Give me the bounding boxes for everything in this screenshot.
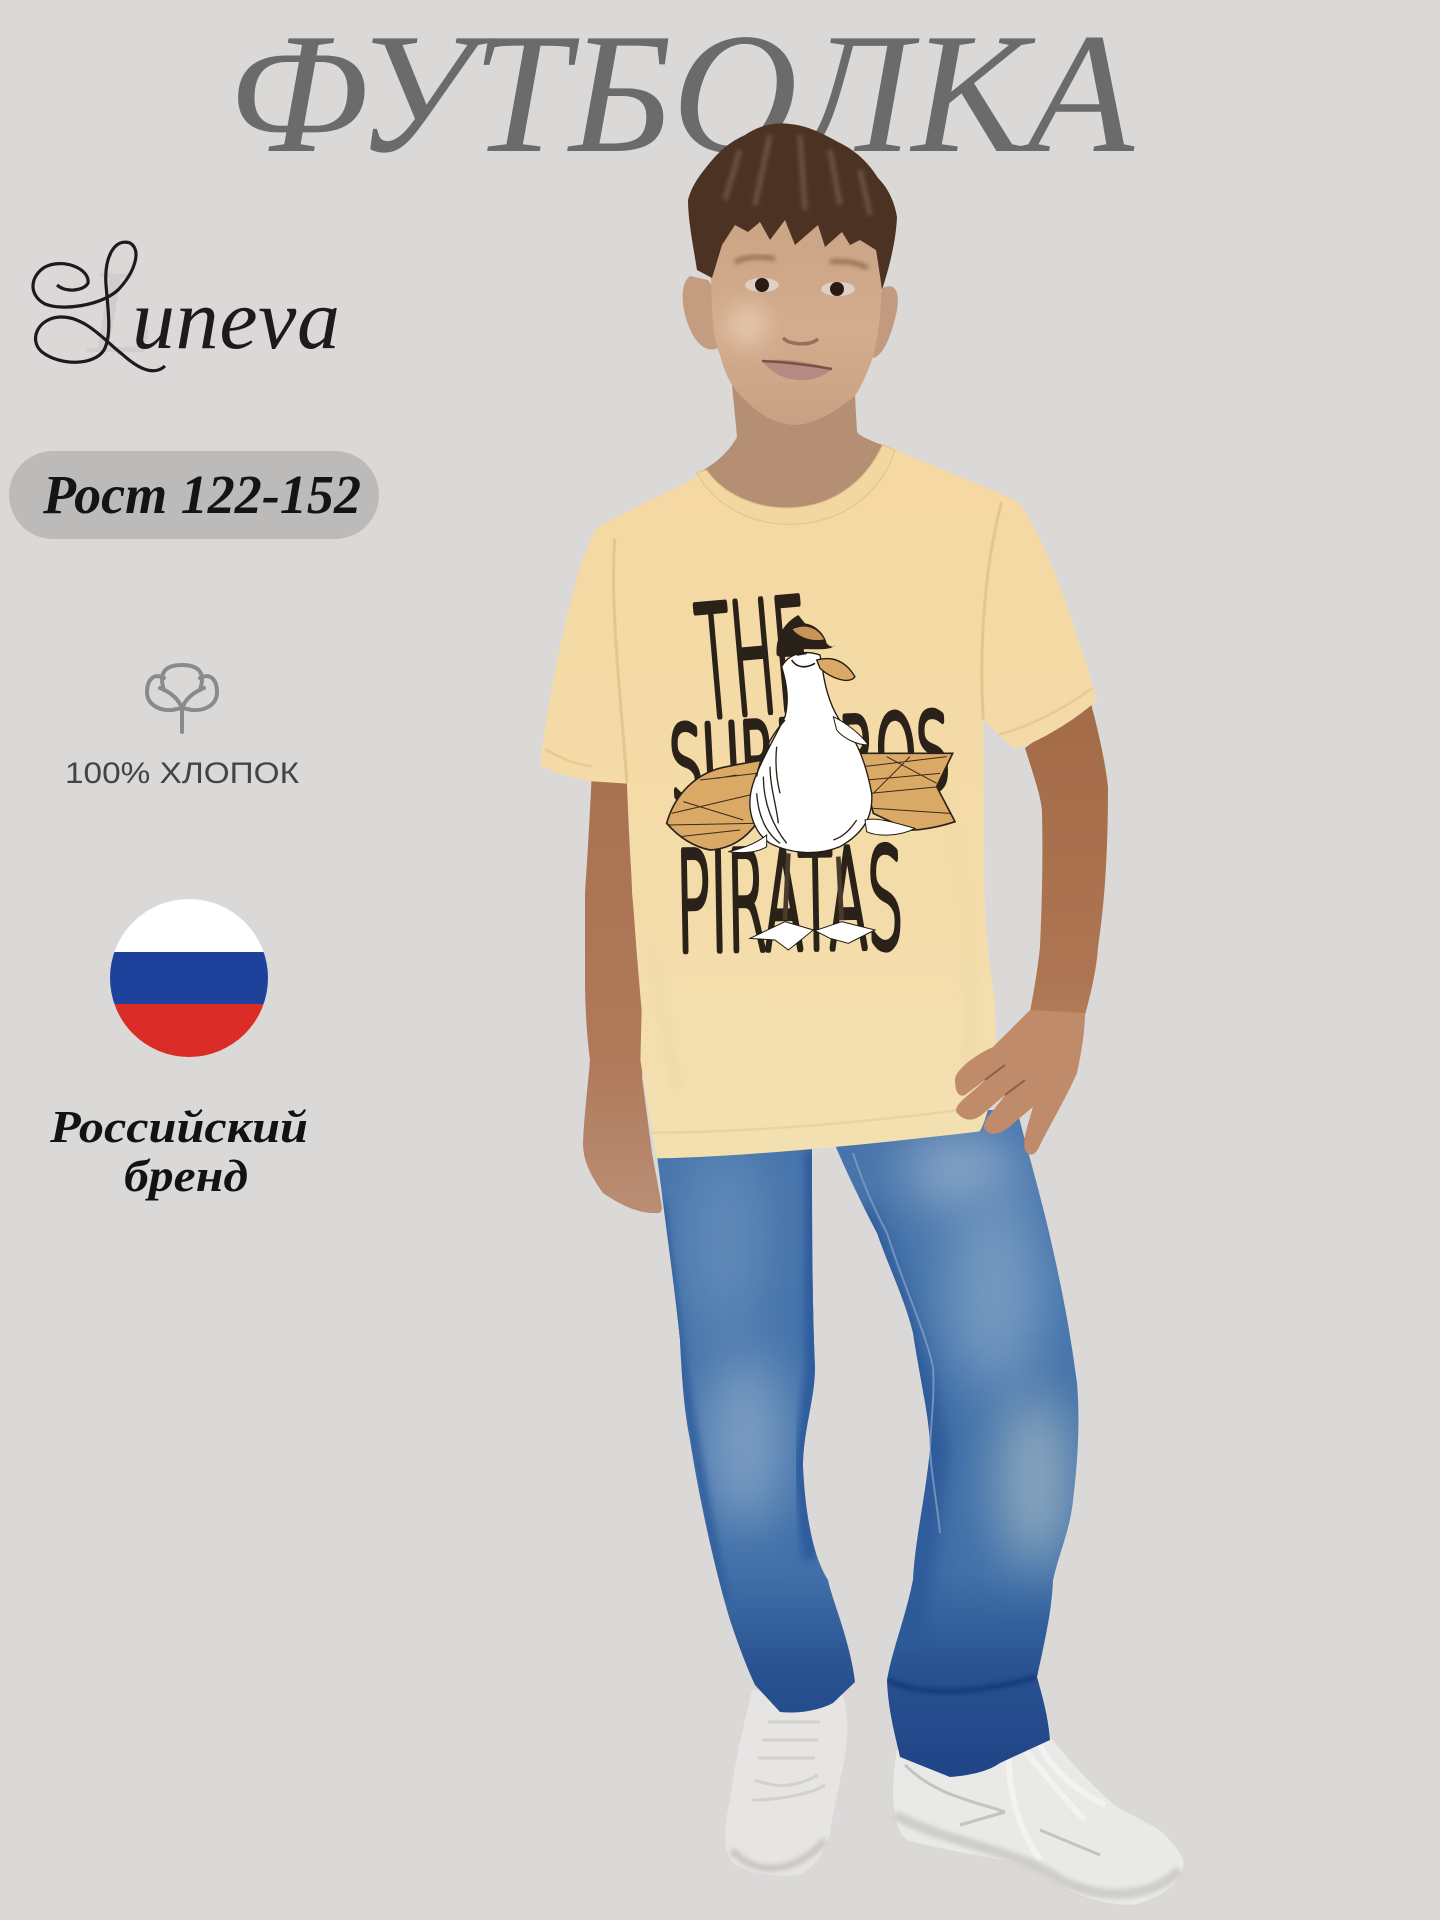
brand caption: Российский (49, 1101, 308, 1152)
white right (821, 282, 855, 296)
upper wing (833, 717, 868, 745)
pupil left (755, 278, 769, 292)
collar (697, 444, 895, 524)
nose (783, 338, 818, 344)
hair (688, 123, 897, 290)
t-shirt (540, 444, 1097, 1158)
infographic canvas (9, 37, 1184, 1905)
lip line (762, 361, 832, 369)
beak (817, 659, 855, 680)
hair streaks (725, 135, 870, 215)
wing tip right (865, 819, 915, 835)
icon: Russian flag (110, 899, 268, 1057)
eyes (745, 278, 855, 296)
jeans (657, 1110, 1078, 1777)
feet (750, 922, 875, 950)
shirt print (667, 567, 955, 984)
right hand (955, 1010, 1085, 1155)
left ear (683, 276, 722, 349)
finger gaps (985, 1065, 1025, 1095)
wing tip left (728, 835, 767, 853)
logo: Luneva (33, 242, 340, 378)
brand caption (49, 1101, 308, 1201)
logo initial (real text, faint, lying over the flourish): L (86, 245, 155, 378)
pupil right (830, 282, 844, 296)
print words (667, 567, 953, 984)
hat band (793, 627, 824, 640)
seagull body (728, 653, 915, 853)
second word: SURFBROS (667, 692, 953, 827)
right foot (815, 922, 875, 943)
sleeve cuffs (545, 688, 1092, 767)
head (683, 123, 898, 425)
print words: THE (690, 567, 817, 754)
neck (700, 385, 895, 550)
icon: cotton (147, 665, 217, 732)
right ear (868, 286, 898, 358)
left arm (583, 770, 662, 1213)
figure: boy (540, 123, 1184, 1905)
eyebrows (735, 257, 868, 268)
height badge (9, 451, 379, 539)
sleeve seams (614, 502, 1002, 784)
hem (650, 1108, 973, 1133)
eye and smile (792, 653, 815, 667)
caption second line: бренд (124, 1150, 248, 1201)
print words: PIRATAS (675, 821, 905, 984)
title: ФУТБОЛКА (228, 0, 1135, 189)
right shoe (893, 1725, 1184, 1905)
cotton label: 100% ХЛОПОК (65, 757, 300, 790)
hat (776, 615, 835, 657)
face (708, 190, 883, 425)
left shoe (725, 1690, 847, 1876)
mouth (762, 360, 832, 380)
legs (785, 853, 842, 920)
surfboard left (667, 760, 765, 850)
right arm (1025, 700, 1108, 1015)
surfboard right (858, 753, 955, 830)
logo: Luneva: uneva (132, 271, 340, 367)
shirt folds (649, 796, 970, 1090)
badge text: Рост 122-152 (42, 464, 361, 525)
cheek highlight (727, 303, 767, 347)
